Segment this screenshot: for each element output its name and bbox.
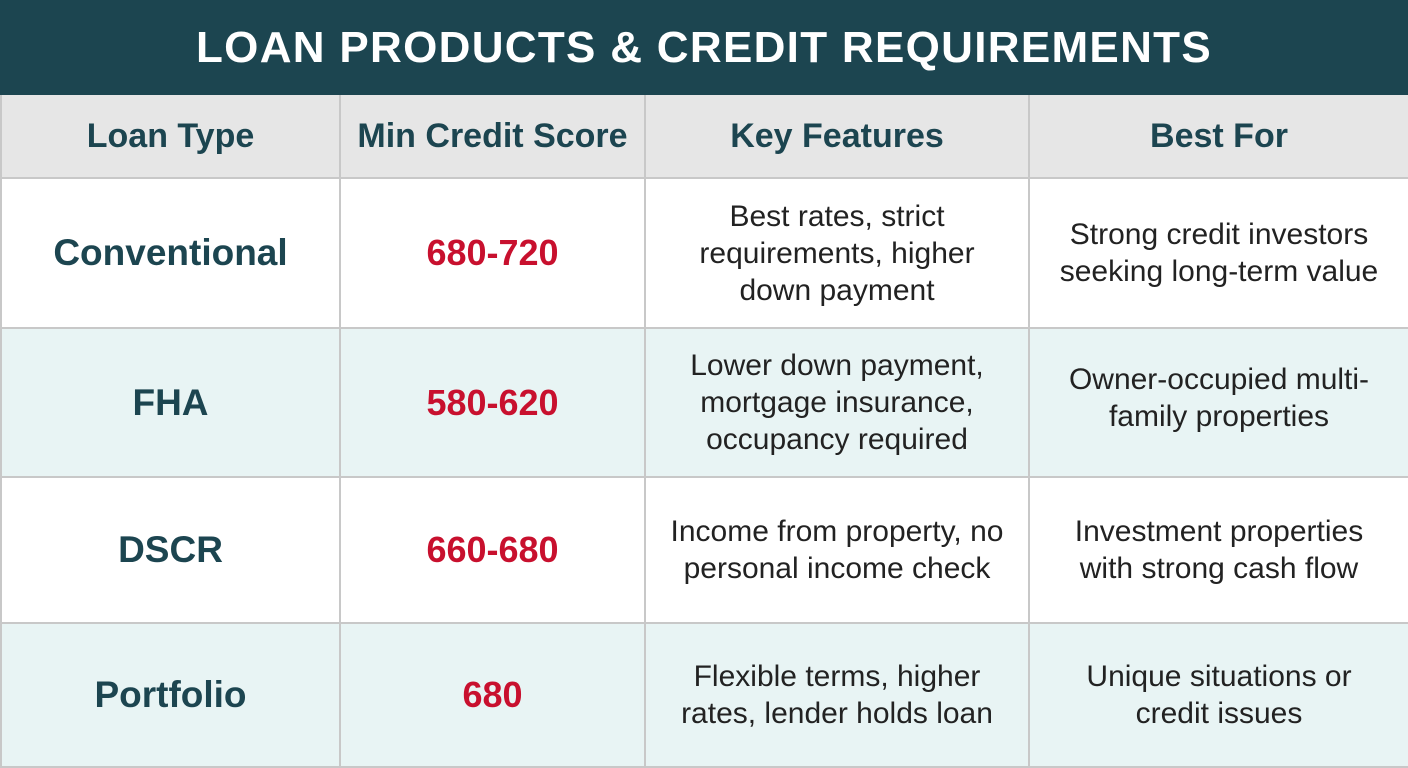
features: FHA <box>646 329 1030 478</box>
header: best for: Best For <box>1150 116 1288 154</box>
score: portfolio: 680 <box>462 674 523 715</box>
row: conventional: Conventional <box>53 232 288 273</box>
header: loan type <box>2 95 341 179</box>
row: conventional <box>2 179 341 329</box>
features: FHA: occupancy required <box>706 423 968 456</box>
row: portfolio: Portfolio <box>94 674 247 715</box>
title: LOAN PRODUCTS & CREDIT REQUIREMENTS <box>196 22 1212 72</box>
best for: FHA: Owner-occupied multi- <box>1069 362 1369 396</box>
score: FHA: 580-620 <box>426 382 559 422</box>
features: portfolio: rates, lender holds loan <box>681 697 993 730</box>
header: key features <box>646 95 1030 179</box>
row: DSCR: DSCR <box>118 529 223 570</box>
best for: conventional <box>1030 179 1408 329</box>
features: portfolio <box>646 624 1030 768</box>
score: DSCR <box>341 478 646 624</box>
features: conventional: requirements, higher <box>699 236 975 270</box>
row: FHA <box>2 329 341 478</box>
best for: DSCR: Investment properties <box>1075 515 1363 548</box>
best for: DSCR: with strong cash flow <box>1080 552 1358 585</box>
header: best for <box>1030 95 1408 179</box>
header: min credit score <box>341 95 646 179</box>
features: DSCR <box>646 478 1030 624</box>
features: conventional: down payment <box>739 274 935 306</box>
best for: portfolio: Unique situations or <box>1086 660 1352 693</box>
best for: FHA <box>1030 329 1408 478</box>
header: key features: Key Features <box>730 116 944 154</box>
row: portfolio <box>2 624 341 768</box>
features: DSCR: personal income check <box>684 552 990 585</box>
score: FHA <box>341 329 646 478</box>
features: DSCR: Income from property, no <box>671 515 1003 548</box>
best for: portfolio <box>1030 624 1408 768</box>
best for: DSCR <box>1030 478 1408 624</box>
row: FHA: FHA <box>132 382 209 422</box>
best for: portfolio: credit issues <box>1136 697 1302 730</box>
title <box>0 0 1408 95</box>
score: conventional: 680-720 <box>426 232 559 273</box>
score: portfolio <box>341 624 646 768</box>
score: DSCR: 660-680 <box>426 529 559 570</box>
best for: conventional: seeking long-term value <box>1060 255 1378 288</box>
features: FHA: mortgage insurance, <box>700 386 974 419</box>
features: conventional: Best rates, strict <box>729 200 945 232</box>
header: loan type: Loan Type <box>87 116 254 154</box>
features: portfolio: Flexible terms, higher <box>694 660 980 693</box>
row: DSCR <box>2 478 341 624</box>
score: conventional <box>341 179 646 329</box>
features: FHA: Lower down payment, <box>690 349 984 382</box>
header: min credit score: Min Credit Score <box>357 116 628 154</box>
features: conventional <box>646 179 1030 329</box>
best for: conventional: Strong credit investors <box>1070 218 1368 251</box>
best for: FHA: family properties <box>1109 400 1329 432</box>
